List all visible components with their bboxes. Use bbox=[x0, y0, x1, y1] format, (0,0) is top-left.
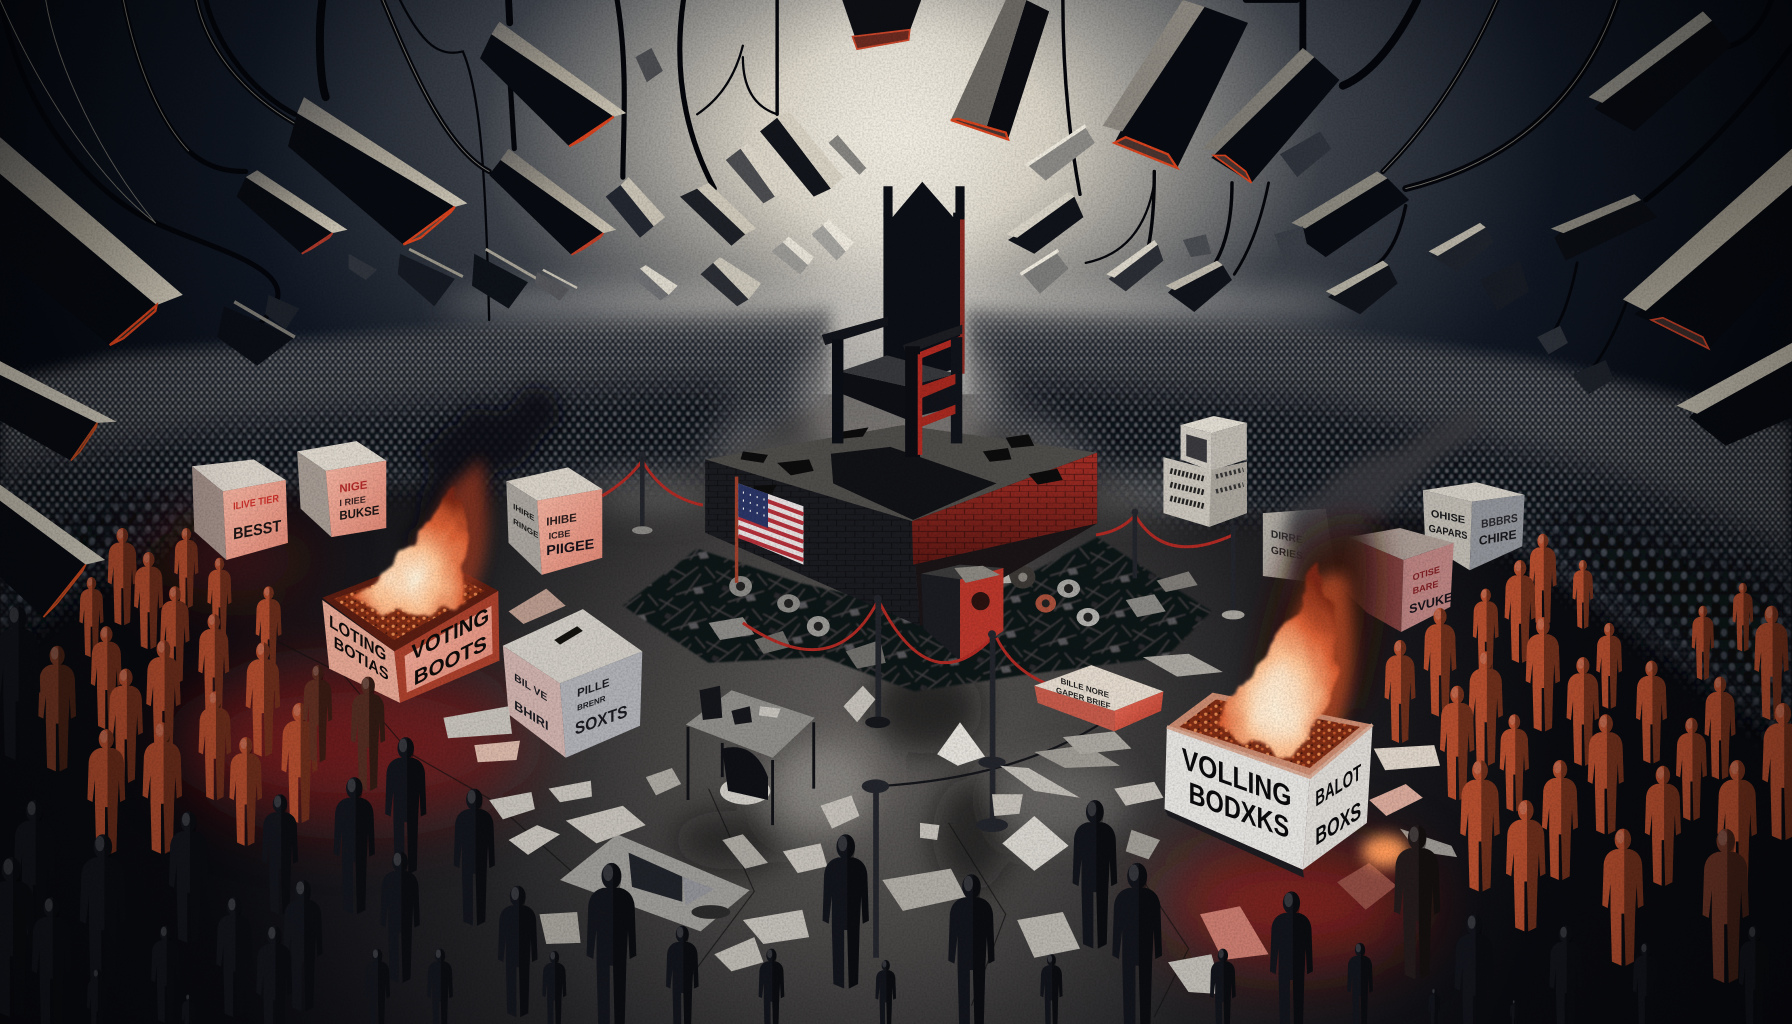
brick platform bbox=[705, 425, 1097, 626]
white ballot box, right back: GAPARS bbox=[1429, 524, 1467, 542]
red-tinted ballot box, right: OTISE bbox=[1413, 565, 1440, 583]
orange figures, right group bbox=[1385, 534, 1792, 983]
gray ballot box with slot: SOXTS bbox=[575, 701, 628, 739]
central light beam bbox=[811, 0, 983, 457]
pink ballot box, far left bbox=[192, 459, 288, 560]
empty throne bbox=[822, 182, 965, 457]
pink ballot box by the rope: RINGE bbox=[513, 516, 539, 541]
smoke and fire, right box bbox=[1257, 406, 1482, 731]
scattered papers bbox=[443, 571, 1457, 994]
American flag bbox=[735, 477, 803, 583]
gray ballot box with slot bbox=[503, 609, 642, 758]
dark silhouettes in the foreground bbox=[0, 606, 1770, 1024]
burning ballot box, right: BALOT bbox=[1315, 760, 1361, 812]
center surveillance cameras bbox=[606, 0, 1049, 306]
pink ballot box, far left back bbox=[297, 441, 386, 537]
white ballot box behind smoke: GRIES bbox=[1271, 545, 1303, 563]
pink ballot box by the rope: PIIGEE bbox=[546, 536, 594, 558]
burning voting box, left: VOTING bbox=[411, 602, 489, 665]
pink ballot box, far left back: I RIEE bbox=[339, 494, 366, 508]
white ballot box, right back: CHIRE bbox=[1479, 527, 1517, 548]
pink ballot box, far left: BESST bbox=[233, 517, 281, 543]
gray ballot box with slot: BHIRI bbox=[514, 697, 549, 734]
red glow on the floor bbox=[149, 526, 1417, 960]
pink crate with papers bbox=[1034, 665, 1163, 731]
white ballot box, right back: BBBRS bbox=[1481, 512, 1518, 531]
small table with stool bbox=[686, 686, 815, 825]
fire and smoke, left box bbox=[349, 399, 549, 613]
orange figures, left group bbox=[38, 528, 385, 855]
lower desk with laptop bbox=[560, 834, 750, 931]
white ballot box, right back: OHISE bbox=[1431, 509, 1465, 526]
burning voting box, left bbox=[322, 555, 499, 703]
red-tinted ballot box, right: SVUKE bbox=[1409, 589, 1453, 617]
pink crate with papers: BILLE NORE bbox=[1061, 677, 1109, 700]
pink ballot box by the rope: IHIBE bbox=[546, 512, 577, 529]
cables bbox=[0, 0, 1792, 366]
debris pile of twigs and broken cameras bbox=[623, 537, 1211, 691]
red-tinted ballot box, right: BARE bbox=[1413, 579, 1438, 596]
floor ember glow bbox=[1362, 835, 1408, 867]
burning ballot box, right: BOXS bbox=[1315, 795, 1361, 851]
burning voting box, left: BOTIAS bbox=[334, 632, 389, 685]
red-tinted ballot box, right bbox=[1337, 528, 1454, 632]
right surveillance cameras bbox=[1006, 0, 1792, 446]
pink ballot box, far left back: NIGE bbox=[339, 479, 368, 496]
fog layer over the horizon bbox=[440, 288, 1354, 512]
white stacked machine bbox=[1163, 416, 1247, 527]
white ballot box behind smoke: DIRRE bbox=[1271, 529, 1303, 547]
gray ballot box with slot: PILLE bbox=[577, 676, 610, 700]
floor bbox=[0, 394, 1792, 1024]
pink ballot box, far left: ILIVE TIER bbox=[233, 493, 279, 513]
stanchions and red ropes bbox=[602, 451, 1245, 958]
gray ballot box with slot: BIL VE bbox=[514, 672, 548, 704]
left surveillance cameras bbox=[0, 22, 626, 617]
pink ballot box, far left back: BUKSE bbox=[339, 503, 379, 523]
pink crate with papers: GAPER BRIEF bbox=[1056, 686, 1111, 711]
burning voting box, left: LOTING bbox=[329, 611, 386, 665]
distant crowd bbox=[0, 297, 1792, 754]
burning ballot box, right: BODXKS bbox=[1189, 776, 1289, 845]
dark safe with red face bbox=[921, 565, 1003, 661]
burning voting box, left: BOOTS bbox=[414, 630, 487, 690]
floor cracks bbox=[274, 640, 1189, 1017]
pink ballot box by the rope bbox=[506, 467, 602, 575]
white ballot box, right back bbox=[1423, 482, 1525, 570]
burning ballot box, right bbox=[1165, 693, 1373, 878]
white ballot box behind smoke bbox=[1263, 509, 1337, 585]
pink ballot box by the rope: ICBE bbox=[549, 528, 570, 541]
pink ballot box by the rope: IHIRE bbox=[513, 501, 535, 523]
floor light and shadow bbox=[674, 663, 1131, 891]
gray ballot box with slot: BRENR bbox=[577, 694, 606, 713]
flames inside right box bbox=[1217, 571, 1335, 754]
burning ballot box, right: VOLLING bbox=[1182, 742, 1291, 814]
